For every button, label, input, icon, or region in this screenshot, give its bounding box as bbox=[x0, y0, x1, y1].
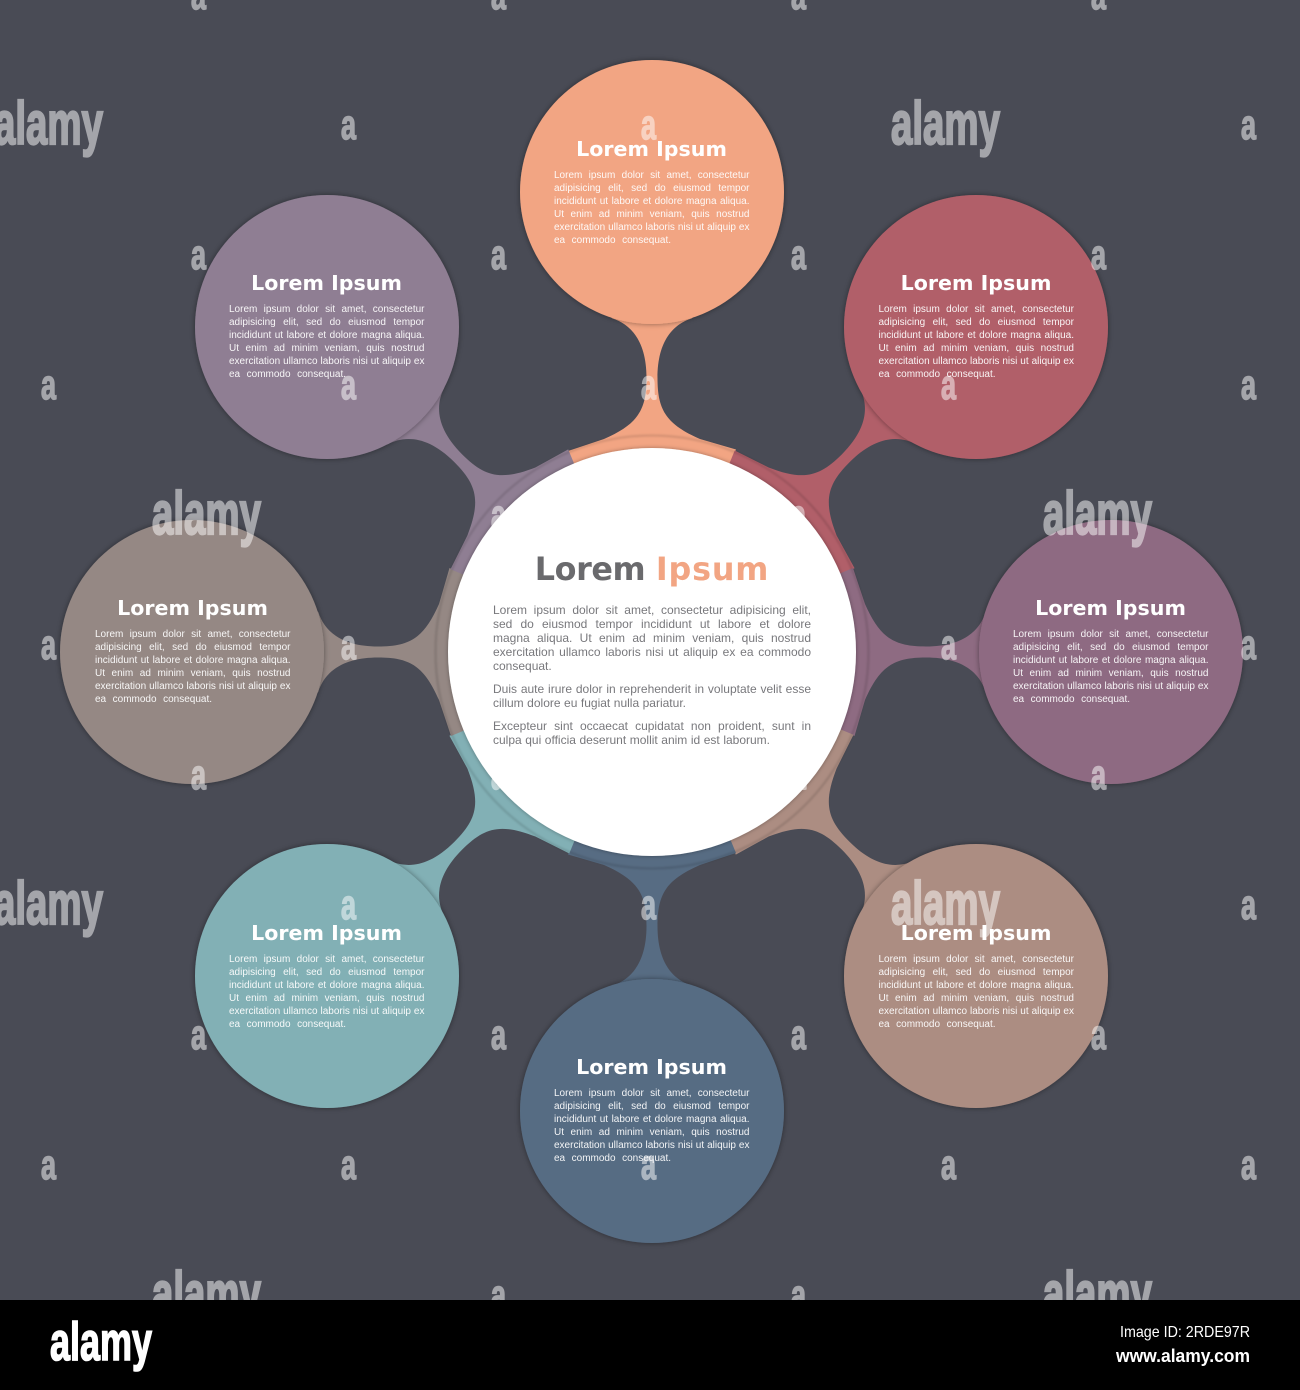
text block: lower left circle: Ut enim ad minim veniam, quis nostrud bbox=[229, 992, 424, 1004]
circle: top bbox=[520, 60, 784, 324]
watermark overlay: alamy bbox=[152, 480, 261, 547]
text block: upper left circle: exercitation ullamco laboris nisi ut aliquip ex bbox=[229, 356, 424, 366]
text block: right circle: incididunt ut labore et dolore magna aliqua. bbox=[1013, 654, 1208, 666]
text block: lower right circle: exercitation ullamco laboris nisi ut aliquip ex bbox=[878, 1006, 1074, 1016]
connector: left bbox=[310, 568, 652, 736]
text block: upper right circle bbox=[878, 271, 1074, 380]
connector: right bbox=[652, 568, 994, 736]
text block: right circle bbox=[1013, 596, 1208, 704]
text block: upper right circle: Lorem Ipsum bbox=[901, 271, 1051, 295]
circle: right bbox=[979, 520, 1243, 784]
watermark overlay: alamy bbox=[1043, 1260, 1152, 1327]
watermark overlay: a bbox=[41, 621, 56, 668]
text block: right circle: Lorem Ipsum bbox=[1035, 596, 1186, 620]
watermark overlay: a bbox=[341, 361, 356, 408]
watermark overlay: a bbox=[1241, 361, 1256, 408]
connector: top bbox=[568, 310, 736, 652]
text block: left circle: Ut enim ad minim veniam, quis nostrud bbox=[95, 668, 290, 678]
text block: left circle: ea commodo consequat. bbox=[95, 694, 212, 704]
watermark overlay: a bbox=[791, 751, 806, 798]
text block: upper right circle: Lorem ipsum dolor sit amet, consectetur bbox=[878, 304, 1074, 314]
watermark overlay: a bbox=[641, 881, 656, 928]
text block: lower right circle: adipisicing elit, sed do eiusmod tempor bbox=[878, 966, 1074, 978]
central text block: Lorem Ipsum bbox=[535, 551, 769, 588]
footer bar bbox=[0, 1300, 1300, 1390]
watermark overlay: a bbox=[491, 1011, 506, 1058]
text block: upper right circle: adipisicing elit, sed do eiusmod tempor bbox=[878, 316, 1074, 328]
watermark overlay: a bbox=[191, 1011, 206, 1058]
text block: upper left circle: ea commodo consequat. bbox=[229, 368, 346, 380]
text block: top circle: Lorem Ipsum bbox=[576, 137, 727, 161]
watermark overlay: a bbox=[191, 751, 206, 798]
text block: upper left circle: Ut enim ad minim veniam, quis nostrud bbox=[229, 342, 424, 354]
text block: upper left circle: adipisicing elit, sed do eiusmod tempor bbox=[229, 316, 424, 328]
text block: top circle: adipisicing elit, sed do eiusmod tempor bbox=[554, 182, 750, 194]
circle: left bbox=[60, 520, 324, 784]
watermark overlay: a bbox=[491, 751, 506, 798]
image id: Image ID: 2RDE97R bbox=[1120, 1324, 1250, 1341]
text block: bottom circle: exercitation ullamco laboris nisi ut aliquip ex bbox=[554, 1140, 750, 1150]
text block: right circle: ea commodo consequat. bbox=[1013, 694, 1130, 704]
footer logo: alamy bbox=[50, 1312, 152, 1372]
circle: lower left bbox=[195, 844, 459, 1108]
central text block: sed do eiusmod tempor incididunt ut labore et dolore bbox=[493, 617, 811, 631]
watermark overlay: alamy bbox=[891, 870, 1000, 937]
text block: lower left circle bbox=[229, 921, 424, 1030]
text block: upper left circle bbox=[229, 271, 424, 380]
watermark overlay: a bbox=[491, 231, 506, 278]
text block: right circle: adipisicing elit, sed do eiusmod tempor bbox=[1013, 642, 1208, 652]
watermark overlay: a bbox=[791, 1011, 806, 1058]
central white circle bbox=[448, 448, 856, 856]
watermark overlay: a bbox=[791, 1271, 806, 1318]
text block: right circle: Ut enim ad minim veniam, quis nostrud bbox=[1013, 668, 1208, 678]
watermark overlay: alamy bbox=[152, 1260, 261, 1327]
text block: right circle: Lorem ipsum dolor sit amet, consectetur bbox=[1013, 628, 1208, 640]
watermark overlay: a bbox=[491, 491, 506, 538]
central text block: consequat. bbox=[493, 659, 552, 673]
text block: upper right circle: incididunt ut labore et dolore magna aliqua. bbox=[878, 330, 1074, 340]
watermark overlay: a bbox=[1241, 101, 1256, 148]
central text block: Duis aute irure dolor in reprehenderit in voluptate velit esse bbox=[493, 682, 811, 696]
text block: lower right circle bbox=[878, 921, 1074, 1030]
watermark overlay: a bbox=[1241, 881, 1256, 928]
watermark overlay: a bbox=[341, 621, 356, 668]
connector: lower left bbox=[351, 593, 711, 953]
watermark overlay: a bbox=[191, 231, 206, 278]
text block: top circle: incididunt ut labore et dolore magna aliqua. bbox=[554, 196, 750, 206]
text block: lower right circle: Lorem ipsum dolor sit amet, consectetur bbox=[878, 954, 1074, 964]
text block: top circle bbox=[554, 137, 750, 246]
watermark overlay: alamy bbox=[891, 90, 1000, 157]
text block: upper right circle: exercitation ullamco laboris nisi ut aliquip ex bbox=[878, 356, 1074, 366]
text block: lower left circle: Lorem Ipsum bbox=[251, 921, 402, 945]
watermark overlay: a bbox=[641, 101, 656, 148]
text block: upper left circle: incididunt ut labore et dolore magna aliqua. bbox=[229, 330, 424, 340]
watermark overlay: a bbox=[341, 881, 356, 928]
watermark overlay: a bbox=[941, 361, 956, 408]
text block: top circle: exercitation ullamco laboris nisi ut aliquip ex bbox=[554, 222, 750, 232]
text block: lower right circle: incididunt ut labore et dolore magna aliqua. bbox=[878, 980, 1074, 990]
text block: bottom circle: ea commodo consequat. bbox=[554, 1152, 671, 1164]
watermark overlay: a bbox=[1091, 751, 1106, 798]
central text block: Lorem ipsum dolor sit amet, consectetur adipisicing elit, bbox=[493, 603, 811, 617]
watermark overlay: a bbox=[941, 621, 956, 668]
watermark overlay: a bbox=[491, 1271, 506, 1318]
text block: left circle: exercitation ullamco laboris nisi ut aliquip ex bbox=[95, 680, 290, 692]
text block: upper left circle: Lorem ipsum dolor sit amet, consectetur bbox=[229, 304, 424, 314]
connector: upper right bbox=[593, 351, 953, 711]
watermark overlay: a bbox=[1091, 231, 1106, 278]
watermark overlay: a bbox=[1241, 1141, 1256, 1188]
central text block: cillum dolore eu fugiat nulla pariatur. bbox=[493, 696, 686, 710]
central text block bbox=[493, 551, 811, 747]
text block: lower left circle: Lorem ipsum dolor sit amet, consectetur bbox=[229, 954, 424, 964]
text block: lower left circle: ea commodo consequat. bbox=[229, 1018, 346, 1030]
text block: top circle: ea commodo consequat. bbox=[554, 234, 671, 246]
text block: left circle: Lorem Ipsum bbox=[117, 596, 268, 620]
watermark overlay: a bbox=[641, 361, 656, 408]
website: www.alamy.com bbox=[1115, 1346, 1250, 1366]
text block: right circle: exercitation ullamco laboris nisi ut aliquip ex bbox=[1013, 680, 1208, 692]
circle: lower right bbox=[844, 844, 1108, 1108]
watermark overlay: a bbox=[1091, 1011, 1106, 1058]
text block: bottom circle: incididunt ut labore et dolore magna aliqua. bbox=[554, 1114, 750, 1124]
connector: lower right bbox=[593, 593, 953, 953]
circle: bottom bbox=[520, 979, 784, 1243]
text block: bottom circle: Ut enim ad minim veniam, quis nostrud bbox=[554, 1126, 750, 1138]
text block: left circle: adipisicing elit, sed do eiusmod tempor bbox=[95, 642, 290, 652]
connector: bottom bbox=[568, 652, 736, 994]
text block: left circle bbox=[95, 596, 290, 704]
watermark overlay: a bbox=[641, 1141, 656, 1188]
text block: bottom circle: Lorem Ipsum bbox=[576, 1055, 727, 1079]
central text block: culpa qui officia deserunt mollit anim id est laborum. bbox=[493, 733, 770, 747]
watermark overlay: a bbox=[941, 1141, 956, 1188]
connector: upper left bbox=[351, 351, 711, 711]
text block: lower left circle: adipisicing elit, sed do eiusmod tempor bbox=[229, 966, 424, 978]
text block: bottom circle: adipisicing elit, sed do eiusmod tempor bbox=[554, 1100, 750, 1112]
text block: top circle: Lorem ipsum dolor sit amet, consectetur bbox=[554, 170, 750, 180]
watermark overlay: a bbox=[341, 1141, 356, 1188]
text block: upper left circle: Lorem Ipsum bbox=[251, 271, 402, 295]
text block: lower right circle: Lorem Ipsum bbox=[901, 921, 1051, 945]
central text block: exercitation ullamco laboris nisi ut aliquip ex ea commodo bbox=[493, 645, 811, 659]
text block: bottom circle: Lorem ipsum dolor sit amet, consectetur bbox=[554, 1088, 750, 1098]
circle: upper left bbox=[195, 195, 459, 459]
watermark overlay: a bbox=[341, 101, 356, 148]
ring shading bbox=[436, 436, 868, 868]
text block: lower left circle: exercitation ullamco laboris nisi ut aliquip ex bbox=[229, 1006, 424, 1016]
text block: lower right circle: Ut enim ad minim veniam, quis nostrud bbox=[878, 992, 1074, 1004]
watermark overlay: a bbox=[1241, 621, 1256, 668]
watermark overlay: a bbox=[41, 1141, 56, 1188]
text block: lower right circle: ea commodo consequat. bbox=[878, 1018, 996, 1030]
central text block: magna aliqua. Ut enim ad minim veniam, quis nostrud bbox=[493, 631, 811, 645]
text block: top circle: Ut enim ad minim veniam, quis nostrud bbox=[554, 208, 750, 220]
text block: bottom circle bbox=[554, 1055, 750, 1164]
central text block: Excepteur sint occaecat cupidatat non proident, sunt in bbox=[493, 719, 811, 733]
watermark overlay: alamy bbox=[1043, 480, 1152, 547]
text block: upper right circle: ea commodo consequat. bbox=[878, 368, 996, 380]
text block: upper right circle: Ut enim ad minim veniam, quis nostrud bbox=[878, 342, 1074, 354]
text block: lower left circle: incididunt ut labore et dolore magna aliqua. bbox=[229, 980, 424, 990]
text block: left circle: Lorem ipsum dolor sit amet, consectetur bbox=[95, 628, 290, 640]
circle: upper right bbox=[844, 195, 1108, 459]
watermark overlay: a bbox=[41, 361, 56, 408]
text block: left circle: incididunt ut labore et dolore magna aliqua. bbox=[95, 654, 290, 666]
watermark overlay: a bbox=[791, 491, 806, 538]
watermark overlay: a bbox=[791, 231, 806, 278]
